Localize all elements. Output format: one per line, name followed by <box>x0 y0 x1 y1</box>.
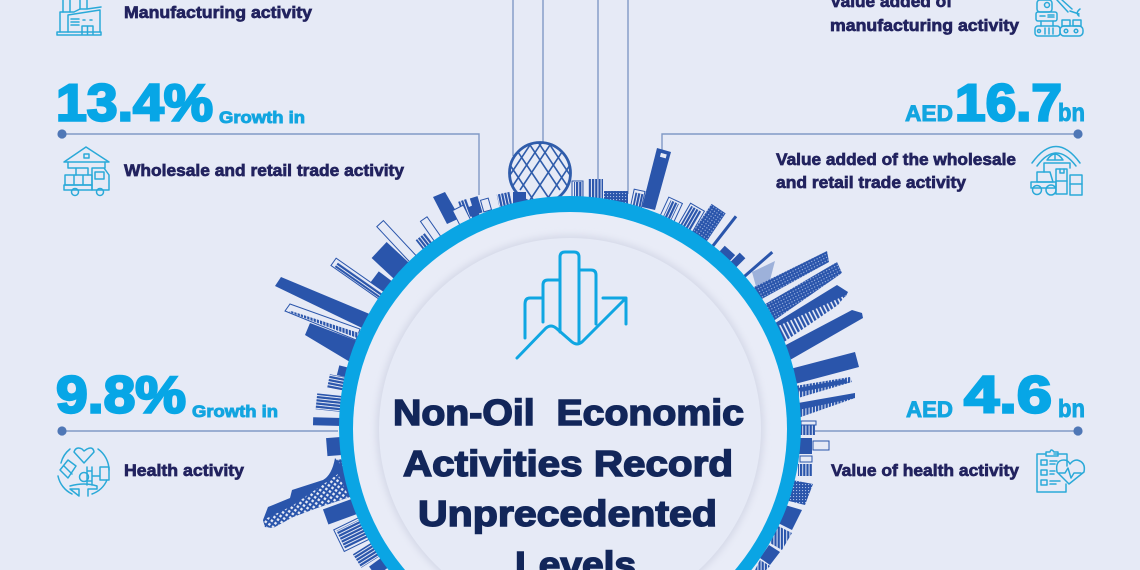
icon: factory <box>57 0 101 35</box>
soft shadow <box>376 235 764 570</box>
suffix: Growth in <box>219 108 305 127</box>
currency: AED <box>905 101 953 126</box>
connector lines <box>62 0 1078 431</box>
dot <box>1073 426 1083 436</box>
currency: AED <box>906 397 953 422</box>
city skyline around the ring <box>263 130 863 570</box>
stat: manufacturing growth (top left) <box>57 0 313 35</box>
label line 1: Value added of the wholesale <box>776 150 1016 169</box>
icon: warehouse and truck <box>64 147 109 196</box>
figure: 16.7 <box>955 74 1062 132</box>
label line 2: and retail trade activity <box>776 173 967 192</box>
figure: 4.6 <box>964 366 1052 424</box>
stat: wholesale and retail growth <box>56 74 405 196</box>
right towers <box>642 148 863 570</box>
icon: warehouse and forklift <box>1031 146 1082 195</box>
top buildings <box>458 179 645 219</box>
label: Health activity <box>124 461 245 480</box>
icon: health and fitness <box>58 448 109 496</box>
unit: bn <box>1058 99 1085 127</box>
unit: bn <box>1058 395 1085 423</box>
label: Manufacturing activity <box>124 3 313 22</box>
label: Value of health activity <box>831 461 1020 480</box>
stat: health growth <box>56 366 278 496</box>
stat: health value <box>831 366 1085 492</box>
dot <box>57 129 67 139</box>
title <box>393 392 744 570</box>
icon: clipboard and heart <box>1037 450 1084 492</box>
label: Wholesale and retail trade activity <box>124 161 405 180</box>
title: Activities Record <box>403 443 733 484</box>
title: Non-Oil Economic <box>393 392 744 433</box>
title: Unprecedented <box>418 493 717 534</box>
figure: 9.8% <box>56 366 186 424</box>
figure: 13.4% <box>56 74 213 132</box>
sail-shaped tower <box>263 458 350 528</box>
suffix: Growth in <box>192 402 278 421</box>
left towers <box>275 192 483 570</box>
icon: growth chart with arrow <box>517 252 626 358</box>
blue ring <box>339 196 801 570</box>
inner disc <box>379 238 761 570</box>
inner plate <box>353 212 787 570</box>
dot <box>57 426 67 436</box>
icon: robot arm and conveyor <box>1035 0 1083 36</box>
dot <box>1073 129 1083 139</box>
stat: manufacturing value added (top right) <box>830 0 1083 36</box>
stat: wholesale and retail value added <box>776 74 1085 195</box>
dome with lattice <box>508 141 572 200</box>
label line 2: manufacturing activity <box>830 16 1020 35</box>
